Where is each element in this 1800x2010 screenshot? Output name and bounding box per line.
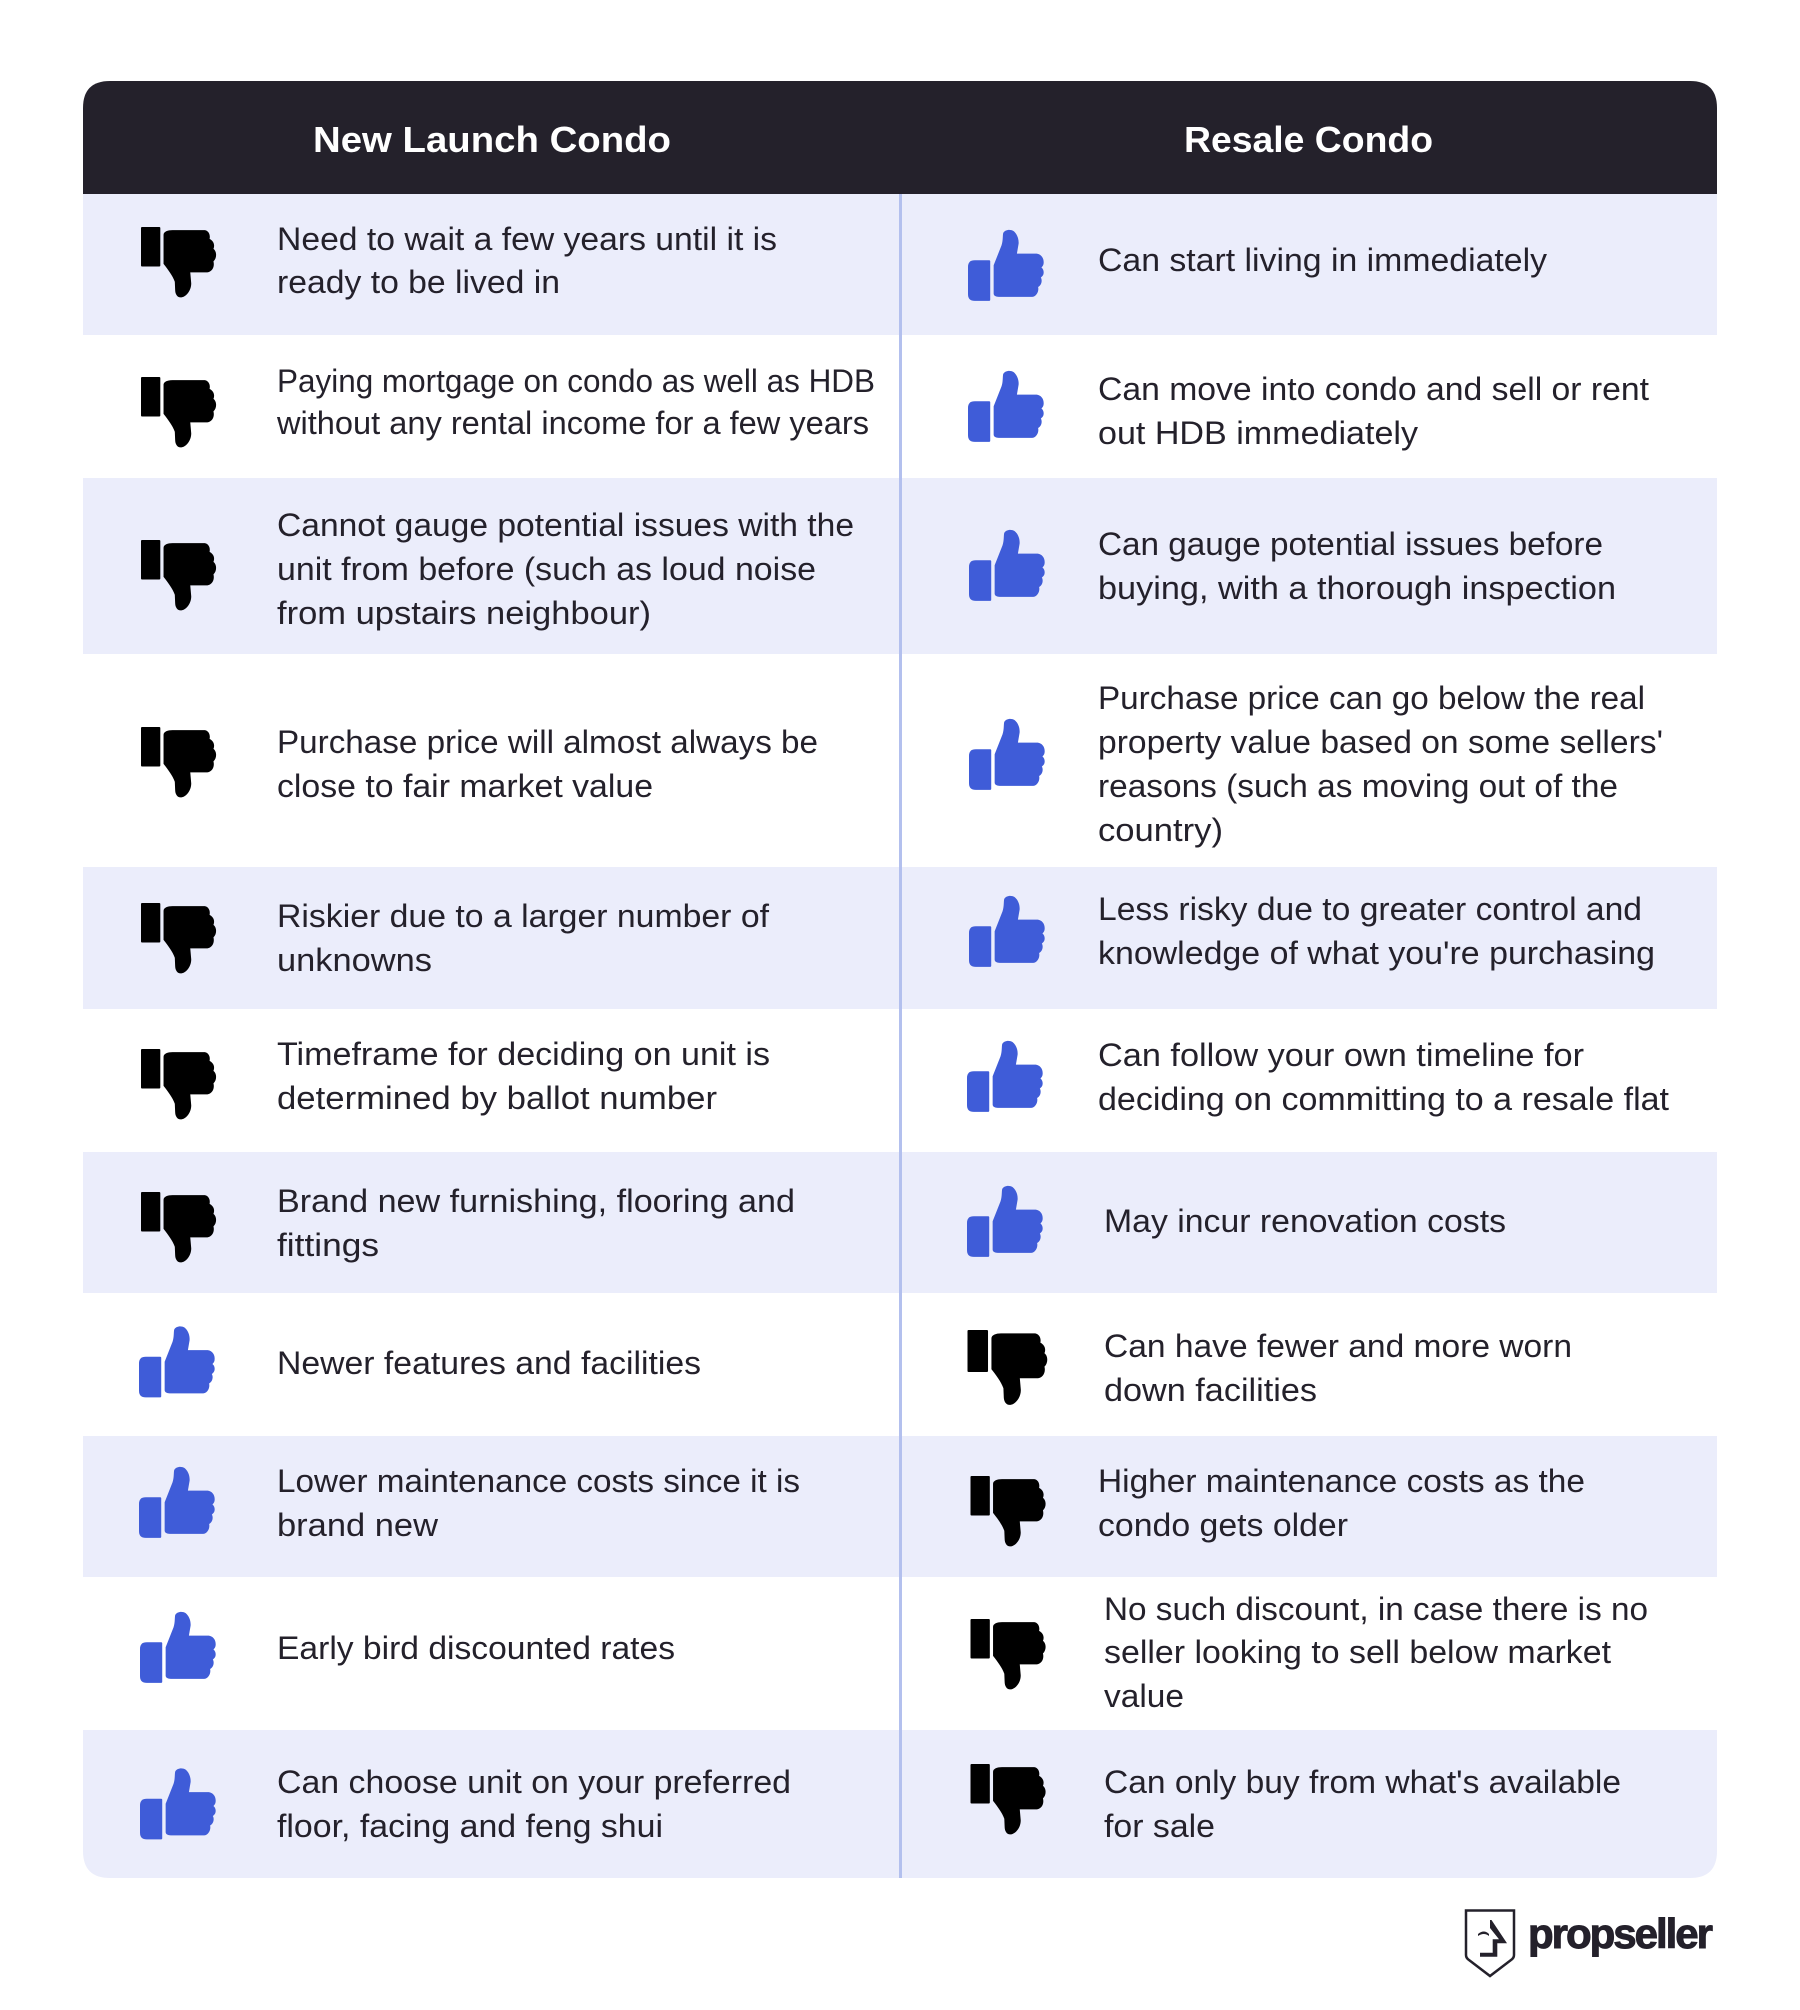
icon: thumbs down <box>141 227 216 297</box>
text: new launch issues: unit from before (such as loud noise <box>277 551 816 587</box>
text: resale move in: out HDB immediately <box>1098 415 1418 451</box>
heading: Resale Condo: Resale Condo <box>1184 119 1433 160</box>
table body background bands <box>83 194 1717 1878</box>
icon: thumbs down <box>970 1619 1046 1689</box>
text: resale risk <box>1098 891 1655 971</box>
text: resale no discount: value <box>1104 1678 1184 1714</box>
text: resale maintenance <box>1098 1463 1585 1543</box>
row 9 <box>139 1463 1585 1546</box>
text: resale issues: buying, with a thorough inspection <box>1098 570 1616 606</box>
text: resale price: Purchase price can go below the real <box>1098 680 1645 716</box>
icon: thumbs up <box>140 1768 216 1839</box>
text: resale no discount: seller looking to sell below market <box>1104 1634 1611 1670</box>
icon: thumbs up <box>140 1612 216 1683</box>
text: resale risk: Less risky due to greater control and <box>1098 891 1642 927</box>
icon: thumbs up <box>967 1041 1043 1112</box>
icon: thumbs up <box>969 530 1045 601</box>
text: new launch wait <box>277 221 777 300</box>
row 8 <box>139 1326 1572 1408</box>
text: resale facilities: Can have fewer and more worn <box>1104 1328 1572 1364</box>
text: new launch risk: Riskier due to a larger number of <box>277 898 769 934</box>
text: new launch early bird: Early bird discounted rates <box>277 1630 675 1666</box>
row 11 <box>140 1764 1621 1844</box>
text: resale risk: knowledge of what you're purchasing <box>1098 935 1655 971</box>
text: resale move in: Can move into condo and sell or rent <box>1098 371 1649 407</box>
icon: thumbs down <box>970 1764 1046 1834</box>
text: resale price: country) <box>1098 812 1223 848</box>
text: new launch risk: unknowns <box>277 942 432 978</box>
text: resale immediate: Can start living in immediately <box>1098 242 1547 278</box>
row 1 <box>141 221 1547 301</box>
icon: shield with face <box>1466 1910 1514 1976</box>
text: new launch furnishing: Brand new furnishing, flooring and <box>277 1183 795 1219</box>
icon: thumbs down <box>141 377 216 447</box>
icon: thumbs up <box>969 719 1045 790</box>
row 7 <box>141 1183 1506 1263</box>
header bar <box>83 81 1717 194</box>
icon: thumbs up <box>969 896 1045 967</box>
text: new launch price <box>277 724 818 804</box>
row 3 <box>141 507 1616 631</box>
text: new launch mortgage <box>276 363 875 441</box>
text: new launch wait: ready to be lived in <box>277 264 560 300</box>
text: resale price <box>1098 680 1663 848</box>
text: new launch timeframe: Timeframe for deciding on unit is <box>277 1036 770 1072</box>
text: resale timeline <box>1098 1037 1669 1117</box>
icon: thumbs up <box>968 230 1044 301</box>
text: new launch maintenance <box>277 1463 800 1543</box>
text: new launch furnishing <box>277 1183 795 1263</box>
text: resale issues: Can gauge potential issues before <box>1098 526 1603 562</box>
text: resale availability: Can only buy from what's available <box>1104 1764 1621 1800</box>
row 4 <box>141 680 1663 848</box>
text: resale maintenance: condo gets older <box>1098 1507 1348 1543</box>
icon: thumbs up <box>139 1467 215 1538</box>
icon: thumbs down <box>970 1476 1046 1546</box>
text: new launch mortgage: Paying mortgage on condo as well as HDB <box>277 363 875 399</box>
text: resale timeline: deciding on committing to a resale flat <box>1098 1081 1669 1117</box>
text: resale timeline: Can follow your own timeline for <box>1098 1037 1584 1073</box>
text: new launch issues <box>277 507 854 631</box>
text: resale no discount: No such discount, in case there is no <box>1104 1591 1648 1627</box>
logo: propseller <box>1466 1910 1713 1976</box>
text: new launch issues: Cannot gauge potential issues with the <box>277 507 854 543</box>
row 6 <box>141 1036 1669 1119</box>
text: new launch facilities: Newer features and facilities <box>277 1345 701 1381</box>
text: resale maintenance: Higher maintenance costs as the <box>1098 1463 1585 1499</box>
icon: thumbs down <box>141 1192 216 1262</box>
icon: thumbs down <box>141 903 216 973</box>
text: resale move in <box>1098 371 1649 451</box>
text: resale issues <box>1098 526 1616 606</box>
text: new launch choice <box>277 1764 791 1844</box>
text: new launch furnishing: fittings <box>277 1227 379 1263</box>
text: new launch timeframe <box>277 1036 770 1116</box>
icon: thumbs up <box>967 1186 1043 1257</box>
text: resale renovation: May incur renovation costs <box>1104 1203 1506 1239</box>
text: new launch price: Purchase price will almost always be <box>277 724 818 760</box>
text: new launch choice: floor, facing and feng shui <box>277 1808 663 1844</box>
text: new launch mortgage: without any rental income for a few years <box>276 405 869 441</box>
text: new launch choice: Can choose unit on your preferred <box>277 1764 791 1800</box>
icon: thumbs up <box>968 371 1044 442</box>
icon: thumbs up <box>139 1326 215 1397</box>
icon: thumbs down <box>141 540 216 610</box>
column divider <box>899 194 902 1878</box>
text: resale price: reasons (such as moving out of the <box>1098 768 1618 804</box>
row 2 <box>141 363 1649 451</box>
text: resale no discount <box>1104 1591 1648 1714</box>
row 5 <box>141 891 1655 978</box>
icon: thumbs down <box>141 727 216 797</box>
icon: thumbs down <box>141 1049 216 1119</box>
icon: thumbs down <box>968 1330 1047 1405</box>
text: new launch price: close to fair market value <box>277 768 653 804</box>
wordmark: propseller <box>1528 1910 1713 1957</box>
text: new launch timeframe: determined by ballot number <box>277 1080 717 1116</box>
text: new launch maintenance: Lower maintenance costs since it is <box>277 1463 800 1499</box>
text: new launch maintenance: brand new <box>277 1507 439 1543</box>
text: resale availability: for sale <box>1104 1808 1215 1844</box>
text: resale facilities <box>1104 1328 1572 1408</box>
text: resale availability <box>1104 1764 1621 1844</box>
text: resale facilities: down facilities <box>1104 1372 1317 1408</box>
text: new launch issues: from upstairs neighbour) <box>277 595 651 631</box>
text: new launch wait: Need to wait a few years until it is <box>277 221 777 257</box>
row 10 <box>140 1591 1648 1714</box>
text: resale price: property value based on some sellers' <box>1098 724 1663 760</box>
text: new launch risk <box>277 898 769 978</box>
heading: New Launch Condo: New Launch Condo <box>313 119 671 160</box>
